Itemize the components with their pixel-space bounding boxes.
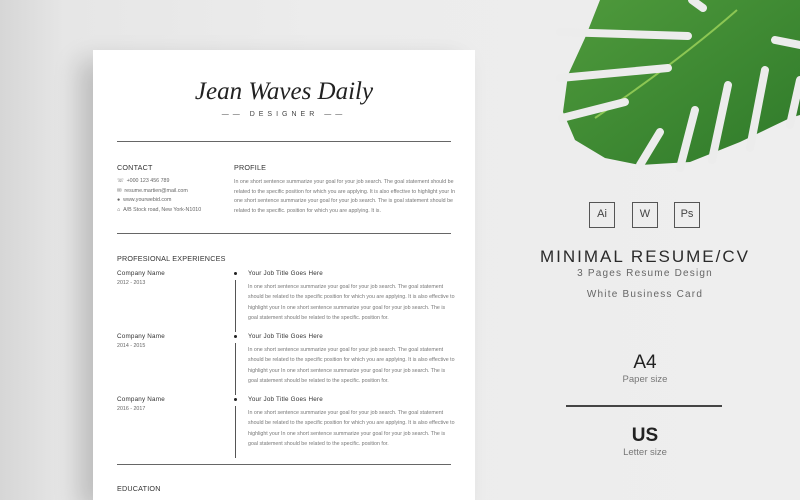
profile text: In one short sentence summarize your goal for your job search. The goal statement should be related to the specific position for which you are applying. It is also effective to highlight your In one short sentence summarize your goal for your job search. The is goal statement should be related to the specific. position for which you are applying. It is. bbox=[234, 179, 455, 214]
product title: MINIMAL RESUME/CV bbox=[540, 247, 750, 266]
leaf decoration bbox=[563, 0, 800, 165]
US size: Letter size bbox=[623, 447, 667, 458]
contact list: ☏ +000 123 456 789 bbox=[117, 178, 169, 184]
experience 3: Company Name bbox=[117, 396, 165, 403]
experience 1 bbox=[117, 270, 455, 332]
contact heading: CONTACT bbox=[117, 163, 153, 172]
subtitle designer: —— DESIGNER —— bbox=[222, 111, 346, 118]
software icons: Ai bbox=[597, 208, 607, 220]
US size bbox=[623, 425, 667, 458]
profile heading: PROFILE bbox=[234, 163, 266, 172]
experience 1: Company Name bbox=[117, 270, 165, 277]
US size: US bbox=[632, 425, 658, 446]
contact list: ● www.yourwebid.com bbox=[117, 197, 171, 203]
education heading: EDUCATION bbox=[117, 484, 161, 493]
A4 size bbox=[623, 352, 667, 385]
product subtitle: 3 Pages Resume Design bbox=[577, 268, 713, 279]
resume page bbox=[93, 50, 475, 500]
A4 size: A4 bbox=[633, 352, 657, 373]
software icons bbox=[589, 202, 700, 228]
software icons: Ps bbox=[681, 208, 693, 220]
experience 3: 2016 - 2017 bbox=[117, 406, 145, 412]
name title: Jean Waves Daily bbox=[195, 78, 373, 105]
experiences heading: PROFESIONAL EXPERIENCES bbox=[117, 254, 226, 263]
experience 3 bbox=[117, 396, 455, 458]
contact list bbox=[117, 178, 201, 213]
experience 3: Your Job Title Goes Here bbox=[248, 396, 323, 403]
contact list: ⌂ A/B Stock road, New York-N1010 bbox=[117, 207, 201, 213]
business card line: White Business Card bbox=[587, 289, 703, 300]
experience 2 bbox=[117, 333, 455, 395]
experience 1: In one short sentence summarize your goal for your job search. The goal statement should be related to the specific position for which you are applying. It is also effective to highlight your In one short sentence summarize your goal for your job search. The is goal statement should be related to the specific. position for. bbox=[248, 284, 455, 321]
experience 1: Your Job Title Goes Here bbox=[248, 270, 323, 277]
experience 2: In one short sentence summarize your goal for your job search. The goal statement should be related to the specific position for which you are applying. It is also effective to highlight your In one short sentence summarize your goal for your job search. The is goal statement should be related to the specific. position for. bbox=[248, 347, 455, 384]
experience 3: In one short sentence summarize your goal for your job search. The goal statement should be related to the specific position for which you are applying. It is also effective to highlight your In one short sentence summarize your goal for your job search. The is goal statement should be related to the specific. position for. bbox=[248, 410, 455, 447]
A4 size: Paper size bbox=[623, 374, 667, 385]
contact list: ✉ resume.martien@mail.com bbox=[117, 188, 188, 194]
experience 2: Your Job Title Goes Here bbox=[248, 333, 323, 340]
experience 2: 2014 - 2015 bbox=[117, 343, 145, 349]
experience 2: Company Name bbox=[117, 333, 165, 340]
experience 1: 2012 - 2013 bbox=[117, 280, 145, 286]
software icons: W bbox=[640, 208, 650, 220]
